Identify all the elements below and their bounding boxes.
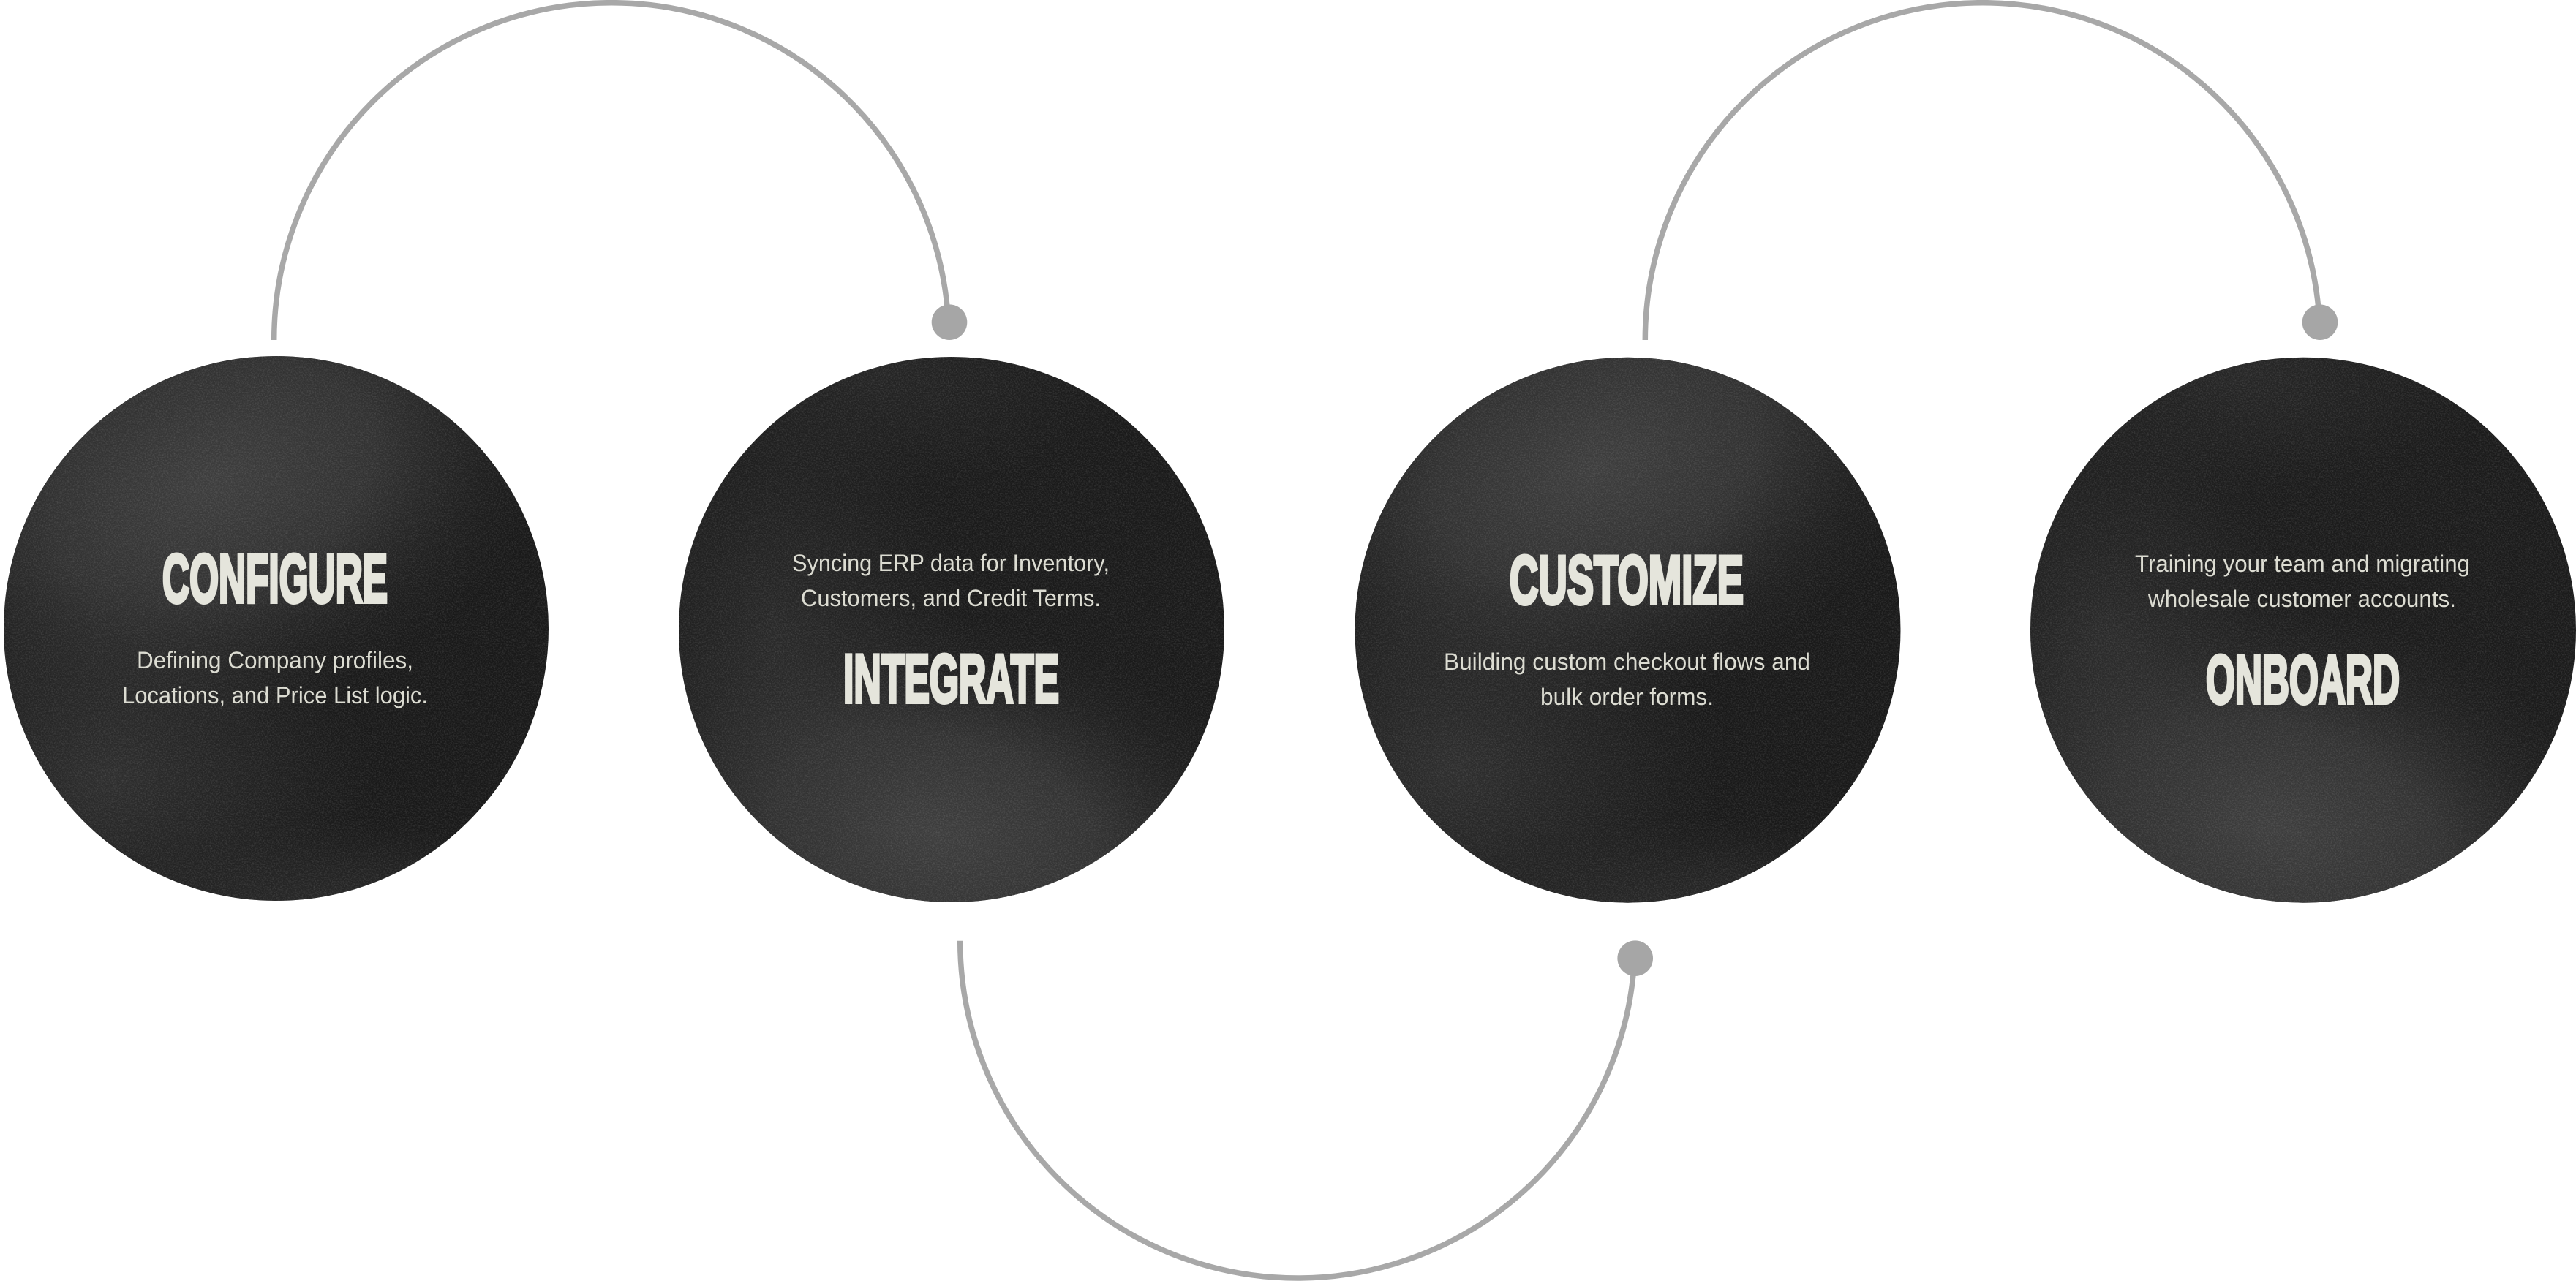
- heading: customize: CUSTOMIZE: [1510, 541, 1744, 619]
- connector dot: onboard: [2302, 304, 2338, 340]
- panel: configure: [4, 356, 549, 901]
- panel: customize: [1355, 357, 1900, 903]
- description: onboard: [2135, 551, 2470, 612]
- description: integrate: Syncing ERP data for Inventory,: [792, 550, 1110, 576]
- description: onboard: wholesale customer accounts.: [2147, 586, 2456, 612]
- connector arc: customize to onboard: [1645, 3, 2319, 340]
- description: integrate: [792, 550, 1110, 611]
- description: customize: bulk order forms.: [1540, 684, 1714, 710]
- connector arc: configure to integrate: [274, 3, 949, 340]
- heading: integrate: INTEGRATE: [843, 640, 1059, 717]
- connector arc: integrate to customize: [960, 941, 1635, 1278]
- description: configure: Locations, and Price List logic.: [122, 682, 428, 708]
- circle background: customize: [1355, 357, 1900, 903]
- circle background: configure: [4, 356, 549, 901]
- connector dot: customize: [1617, 940, 1653, 976]
- heading: onboard: ONBOARD: [2206, 640, 2400, 718]
- connector dot: integrate: [932, 304, 967, 340]
- panel: integrate: [679, 357, 1224, 902]
- heading: configure: CONFIGURE: [162, 540, 388, 617]
- description: onboard: Training your team and migrating: [2135, 551, 2470, 577]
- description: customize: [1444, 649, 1810, 710]
- description: configure: Defining Company profiles,: [137, 647, 413, 673]
- description: configure: [122, 647, 428, 708]
- circle background: onboard: [2030, 357, 2576, 903]
- circle background: integrate: [679, 357, 1224, 902]
- panel: onboard: [2030, 357, 2576, 903]
- description: integrate: Customers, and Credit Terms.: [801, 585, 1101, 611]
- description: customize: Building custom checkout flows and: [1444, 649, 1810, 675]
